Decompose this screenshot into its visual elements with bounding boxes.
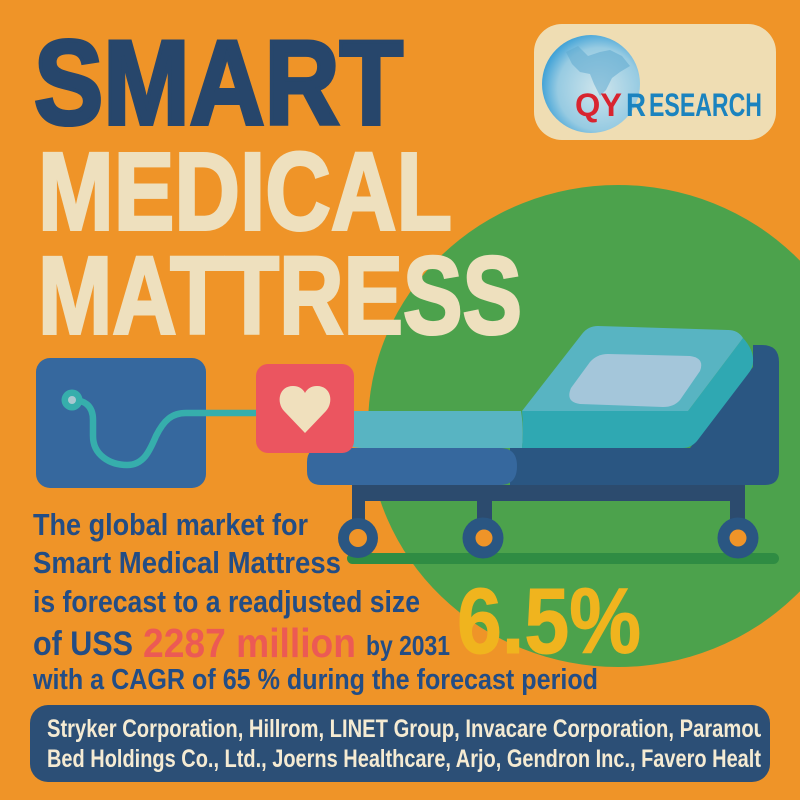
QYResearch logo (534, 24, 776, 140)
monitor panel with stethoscope (36, 358, 256, 488)
stethoscope tube (72, 400, 256, 465)
heart monitor card (256, 364, 354, 453)
green background circle (368, 185, 800, 667)
company list panel (30, 705, 770, 782)
title (34, 16, 522, 358)
logo wordmark (575, 87, 762, 123)
market forecast text (32, 507, 598, 696)
mattress raised top (522, 326, 743, 411)
monitor screen (36, 358, 206, 488)
text line 1: The global market for (33, 507, 308, 542)
text line 2: Smart Medical Mattress (33, 545, 341, 580)
stethoscope head (62, 390, 82, 410)
text line 4: prefix: of USS (33, 625, 133, 663)
hospital bed (307, 326, 779, 564)
bed headboard and base (510, 345, 779, 485)
bed under-frame and legs (352, 485, 745, 530)
wheel: middle (462, 518, 504, 558)
wheel: right (718, 518, 758, 558)
title line: MATTRESS: MATTRESS (38, 234, 522, 358)
pillow (569, 354, 701, 407)
CAGR highlight figure: 6.5% (457, 569, 641, 673)
title line: SMART: SMART (34, 16, 403, 150)
icon: globe (542, 35, 640, 133)
text line 5: with a CAGR of 65 % during the forecast period (32, 664, 598, 696)
logo panel (534, 24, 776, 140)
text line 3: is forecast to a readjusted size (33, 584, 420, 619)
highlighted market size: 2287 million (143, 620, 356, 666)
red card (256, 364, 354, 453)
text line 4: suffix: by 2031 (366, 630, 450, 661)
logo wordmark: R (626, 87, 646, 123)
mattress raised front (522, 338, 753, 448)
bed base front (307, 448, 517, 485)
title line: MEDICAL: MEDICAL (38, 130, 452, 254)
icon: heart (280, 386, 330, 433)
wheel: left (338, 518, 378, 558)
floor shadow (347, 553, 779, 564)
company names (47, 715, 766, 773)
mattress flat section (340, 411, 523, 448)
panel background (30, 705, 770, 782)
logo wordmark: QY (575, 87, 622, 123)
